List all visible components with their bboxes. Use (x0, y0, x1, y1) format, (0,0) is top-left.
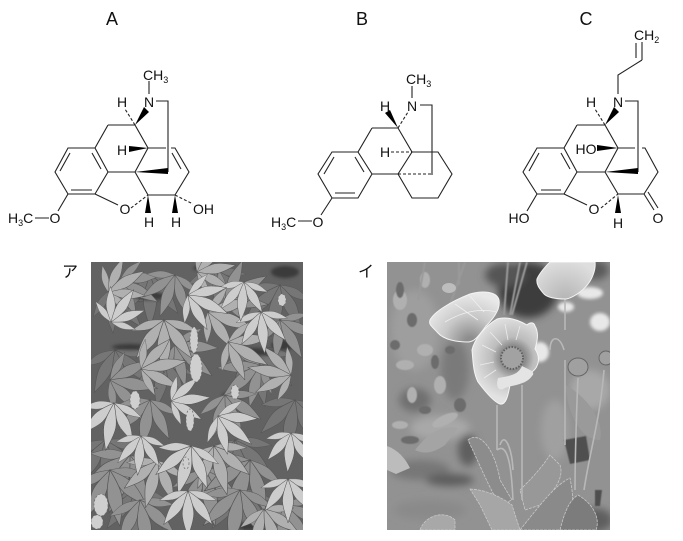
atom labels of molecule A: H (144, 214, 154, 230)
atom labels of molecule A: O (120, 201, 131, 217)
bonds of molecule C (523, 42, 658, 213)
atom labels of molecule A: N (144, 94, 154, 110)
atom labels of molecule A: 3 (18, 218, 23, 228)
atom labels of molecule C: 2 (654, 35, 659, 45)
atom labels of molecule A: H (8, 210, 18, 226)
lighter leaves (92, 240, 308, 541)
flower top right (537, 262, 595, 299)
background stems at top (418, 262, 527, 315)
bonds of molecule B (298, 86, 452, 221)
flower centre (472, 318, 538, 404)
atom labels of molecule C: HO (508, 210, 530, 226)
flower upper left (430, 292, 499, 342)
atom labels of molecule A: H (117, 142, 127, 158)
atom labels of molecule C: O (589, 201, 600, 217)
bright background patches (531, 287, 610, 362)
photo イ: opium poppies (387, 262, 610, 530)
bright leaves (75, 268, 317, 537)
label C: C (580, 9, 592, 29)
photo ア: cannabis plant (91, 262, 303, 530)
atom labels of molecule A: H (117, 94, 127, 110)
atom labels of molecule C: N (613, 94, 623, 110)
atom labels of molecule C: H (586, 94, 596, 110)
label ア: ア (62, 264, 78, 281)
label B: B (356, 9, 368, 29)
label A: A (106, 9, 118, 29)
molecule B (271, 9, 452, 232)
atom labels of molecule B: 3 (426, 79, 431, 89)
bonds of molecule A (35, 81, 193, 218)
blurred background (390, 260, 613, 532)
label イ: イ (358, 264, 374, 281)
atom labels of molecule A: O (50, 210, 61, 226)
mid-tone leaves (72, 249, 336, 541)
atom labels of molecule B: 3 (281, 222, 286, 232)
atom labels of molecule B (271, 71, 431, 232)
leaves (387, 385, 601, 530)
atom labels of molecule C: CH (634, 27, 654, 43)
atom labels of molecule C: HO (576, 141, 597, 157)
atom labels of molecule C: H (613, 215, 623, 231)
atom labels of molecule C (508, 27, 664, 231)
atom labels of molecule A: C (23, 210, 33, 226)
atom labels of molecule B: CH (406, 71, 426, 87)
atom labels of molecule B: H (271, 214, 281, 230)
flower buds (91, 294, 286, 529)
deep shade leaves (68, 261, 329, 541)
atom labels of molecule B: C (286, 214, 296, 230)
seed pods (442, 283, 613, 376)
dark patches (564, 436, 602, 506)
atom labels of molecule A: 3 (163, 75, 168, 85)
stems (497, 298, 604, 500)
atom labels of molecule A (8, 67, 214, 230)
molecule A (8, 9, 214, 230)
dark foliage gaps (112, 265, 299, 530)
molecule C (508, 9, 664, 231)
atom labels of molecule A: CH (143, 67, 163, 83)
atom labels of molecule A: H (171, 214, 181, 230)
atom labels of molecule B: N (407, 98, 417, 114)
atom labels of molecule B: H (380, 144, 390, 160)
atom labels of molecule B: O (313, 214, 324, 230)
atom labels of molecule C: O (653, 210, 664, 226)
foliage texture (390, 272, 466, 444)
atom labels of molecule A: OH (193, 201, 214, 217)
atom labels of molecule B: H (380, 98, 390, 114)
